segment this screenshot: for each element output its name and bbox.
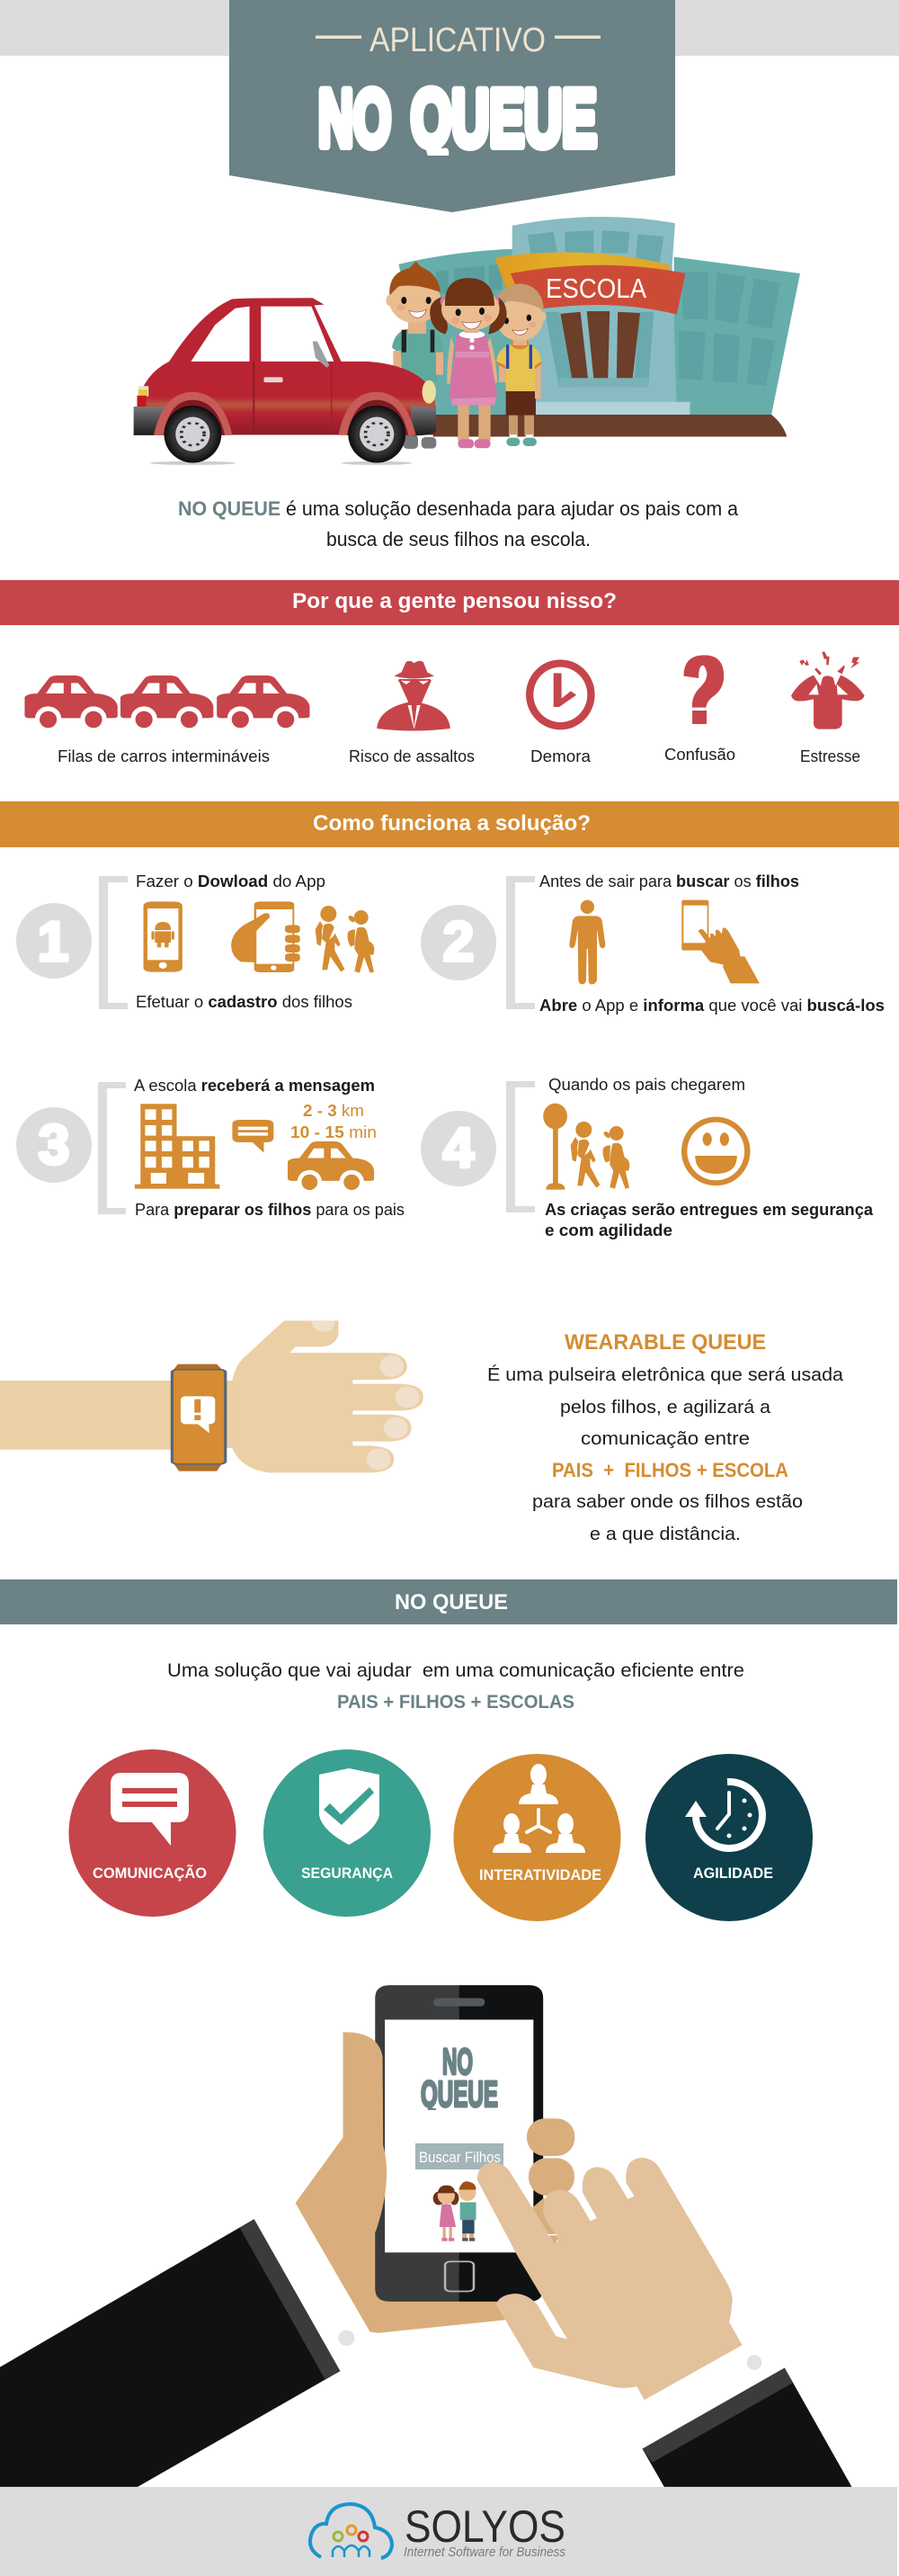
step 2 (421, 872, 885, 1015)
text: wearable queue description: É uma pulseira eletrônica que será usada (487, 1364, 844, 1385)
icon: hand holding phone (231, 901, 300, 972)
step 2: Antes de sair para buscar os filhos (539, 872, 799, 890)
step 3 (16, 1077, 405, 1219)
text: wearable queue description: PAIS + FILHOS + ESCOLA (552, 1459, 788, 1481)
intro paragraph (178, 497, 739, 550)
step 1: 1 (38, 911, 68, 973)
red car (134, 298, 436, 465)
step 1: Efetuar o cadastro dos filhos (136, 993, 352, 1011)
subtitle: aplicativo: APLICATIVO (369, 22, 546, 59)
text: wearable queue description: comunicação entre (581, 1429, 750, 1449)
app screen title (419, 2041, 498, 2121)
step 2: Abre o App e informa que você vai buscá-los (539, 997, 885, 1015)
causes labels: Filas de carros intermináveis (58, 747, 270, 765)
small kids on screen (433, 2181, 476, 2241)
circle: comunicação (68, 1749, 236, 1917)
app screen title: NO (442, 2041, 473, 2082)
icon: finger tapping phone (681, 900, 760, 983)
benefits intro text: PAIS + FILHOS + ESCOLAS (337, 1692, 574, 1713)
step 4: As criaças serão entregues em segurança (545, 1201, 874, 1219)
icon: three cars (24, 675, 310, 731)
title banner (229, 0, 675, 212)
left sleeve (0, 2219, 354, 2487)
circle: agilidade (645, 1754, 813, 1921)
logo: solyos wordmark: Internet Software for Business (404, 2545, 565, 2560)
illustration: hand with wristband (0, 1320, 423, 1472)
title: no queue: QUEUE (411, 73, 597, 163)
text: wearable queue description (487, 1330, 844, 1544)
title: no queue (318, 73, 597, 177)
distance and time (290, 1102, 377, 1141)
benefits intro text (167, 1660, 744, 1713)
illustration: hands holding phone with app (0, 1985, 851, 2487)
icon: smiley (681, 1117, 751, 1185)
app button: buscar filhos: Buscar Filhos (419, 2149, 501, 2166)
left hand (296, 2137, 516, 2333)
illustration: school, kids and car (134, 217, 800, 465)
circle: interatividade (453, 1754, 620, 1921)
panel: no queue benefits (0, 1579, 897, 1921)
step 3: 3 (39, 1114, 69, 1176)
benefits intro text: Uma solução que vai ajudar em uma comunicação eficiente entre (167, 1660, 744, 1681)
sign label: escola: ESCOLA (546, 273, 646, 304)
distance and time: 10 - 15 min (290, 1123, 377, 1141)
text: wearable queue description: WEARABLE QUEUE (565, 1330, 766, 1355)
icon: android phone (144, 901, 182, 972)
icon: question mark (683, 655, 724, 724)
left hand fingertips (527, 2118, 574, 2245)
icon: children at stop (571, 1122, 629, 1189)
circle: comunicação: COMUNICAÇÃO (93, 1864, 207, 1882)
causes labels: Confusão (664, 746, 735, 764)
logo: solyos cloud (310, 2504, 392, 2558)
intro paragraph: NO QUEUE é uma solução desenhada para ajudar os pais com a (178, 497, 739, 520)
circle: segurança (263, 1749, 431, 1917)
step 4: e com agilidade (545, 1221, 672, 1239)
phone (375, 1985, 543, 2302)
icon: walking children (316, 906, 374, 973)
panel: wearable queue (0, 1320, 844, 1544)
icon: school building (135, 1104, 219, 1189)
red heading bar: Por que a gente pensou nisso? (292, 589, 617, 613)
causes labels: Demora (530, 747, 592, 765)
step 4: 4 (443, 1117, 475, 1179)
intro paragraph: busca de seus filhos na escola. (326, 528, 591, 550)
app button: buscar filhos (415, 2143, 503, 2169)
text: wearable queue description: e a que distância. (590, 1525, 741, 1544)
panel: why we thought of it (0, 580, 899, 765)
step 4 (421, 1076, 874, 1239)
teal heading bar (0, 1579, 897, 1624)
step 3: Para preparar os filhos para os pais (135, 1201, 405, 1219)
step 4: Quando os pais chegarem (548, 1076, 745, 1094)
causes labels (58, 746, 860, 765)
icon: stressed person (791, 652, 865, 729)
orange heading bar: Como funciona a solução? (313, 811, 591, 836)
circle: agilidade: AGILIDADE (693, 1865, 773, 1882)
text: wearable queue description: para saber onde os filhos estão (532, 1492, 803, 1512)
causes labels: Risco de assaltos (349, 747, 475, 765)
icon: clock (526, 659, 595, 729)
three kids (386, 262, 547, 449)
left hand thumb (343, 2032, 387, 2236)
step 1 (16, 872, 374, 1011)
icon: robber (377, 661, 450, 730)
distance and time: 2 - 3 km (303, 1102, 364, 1120)
orange heading bar (0, 801, 899, 847)
title: no queue: NO (318, 73, 391, 163)
panel: how the solution works (0, 801, 899, 1239)
icon: school bus stop (543, 1104, 567, 1190)
teal heading bar: NO QUEUE (395, 1590, 508, 1614)
icon: message bubble (232, 1120, 273, 1153)
app screen title: QUEUE (421, 2073, 498, 2115)
text: wearable queue description: pelos filhos, e agilizará a (560, 1398, 771, 1418)
header gray band (0, 0, 899, 56)
step 3: A escola receberá a mensagem (134, 1077, 375, 1095)
circle: segurança: SEGURANÇA (301, 1865, 393, 1882)
school building (398, 217, 800, 437)
right hand pointing (477, 2158, 743, 2400)
causes labels: Estresse (800, 747, 860, 765)
icon: car (288, 1141, 374, 1194)
step 2: 2 (443, 911, 474, 973)
logo: solyos wordmark: SOLYOS (405, 2501, 565, 2552)
step 1: Fazer o Dowload do App (136, 872, 325, 890)
red heading bar (0, 580, 899, 625)
footer band (0, 2487, 897, 2576)
circle: interatividade: INTERATIVIDADE (479, 1866, 601, 1883)
icon: parent standing (569, 900, 605, 984)
right sleeve (643, 2355, 851, 2487)
